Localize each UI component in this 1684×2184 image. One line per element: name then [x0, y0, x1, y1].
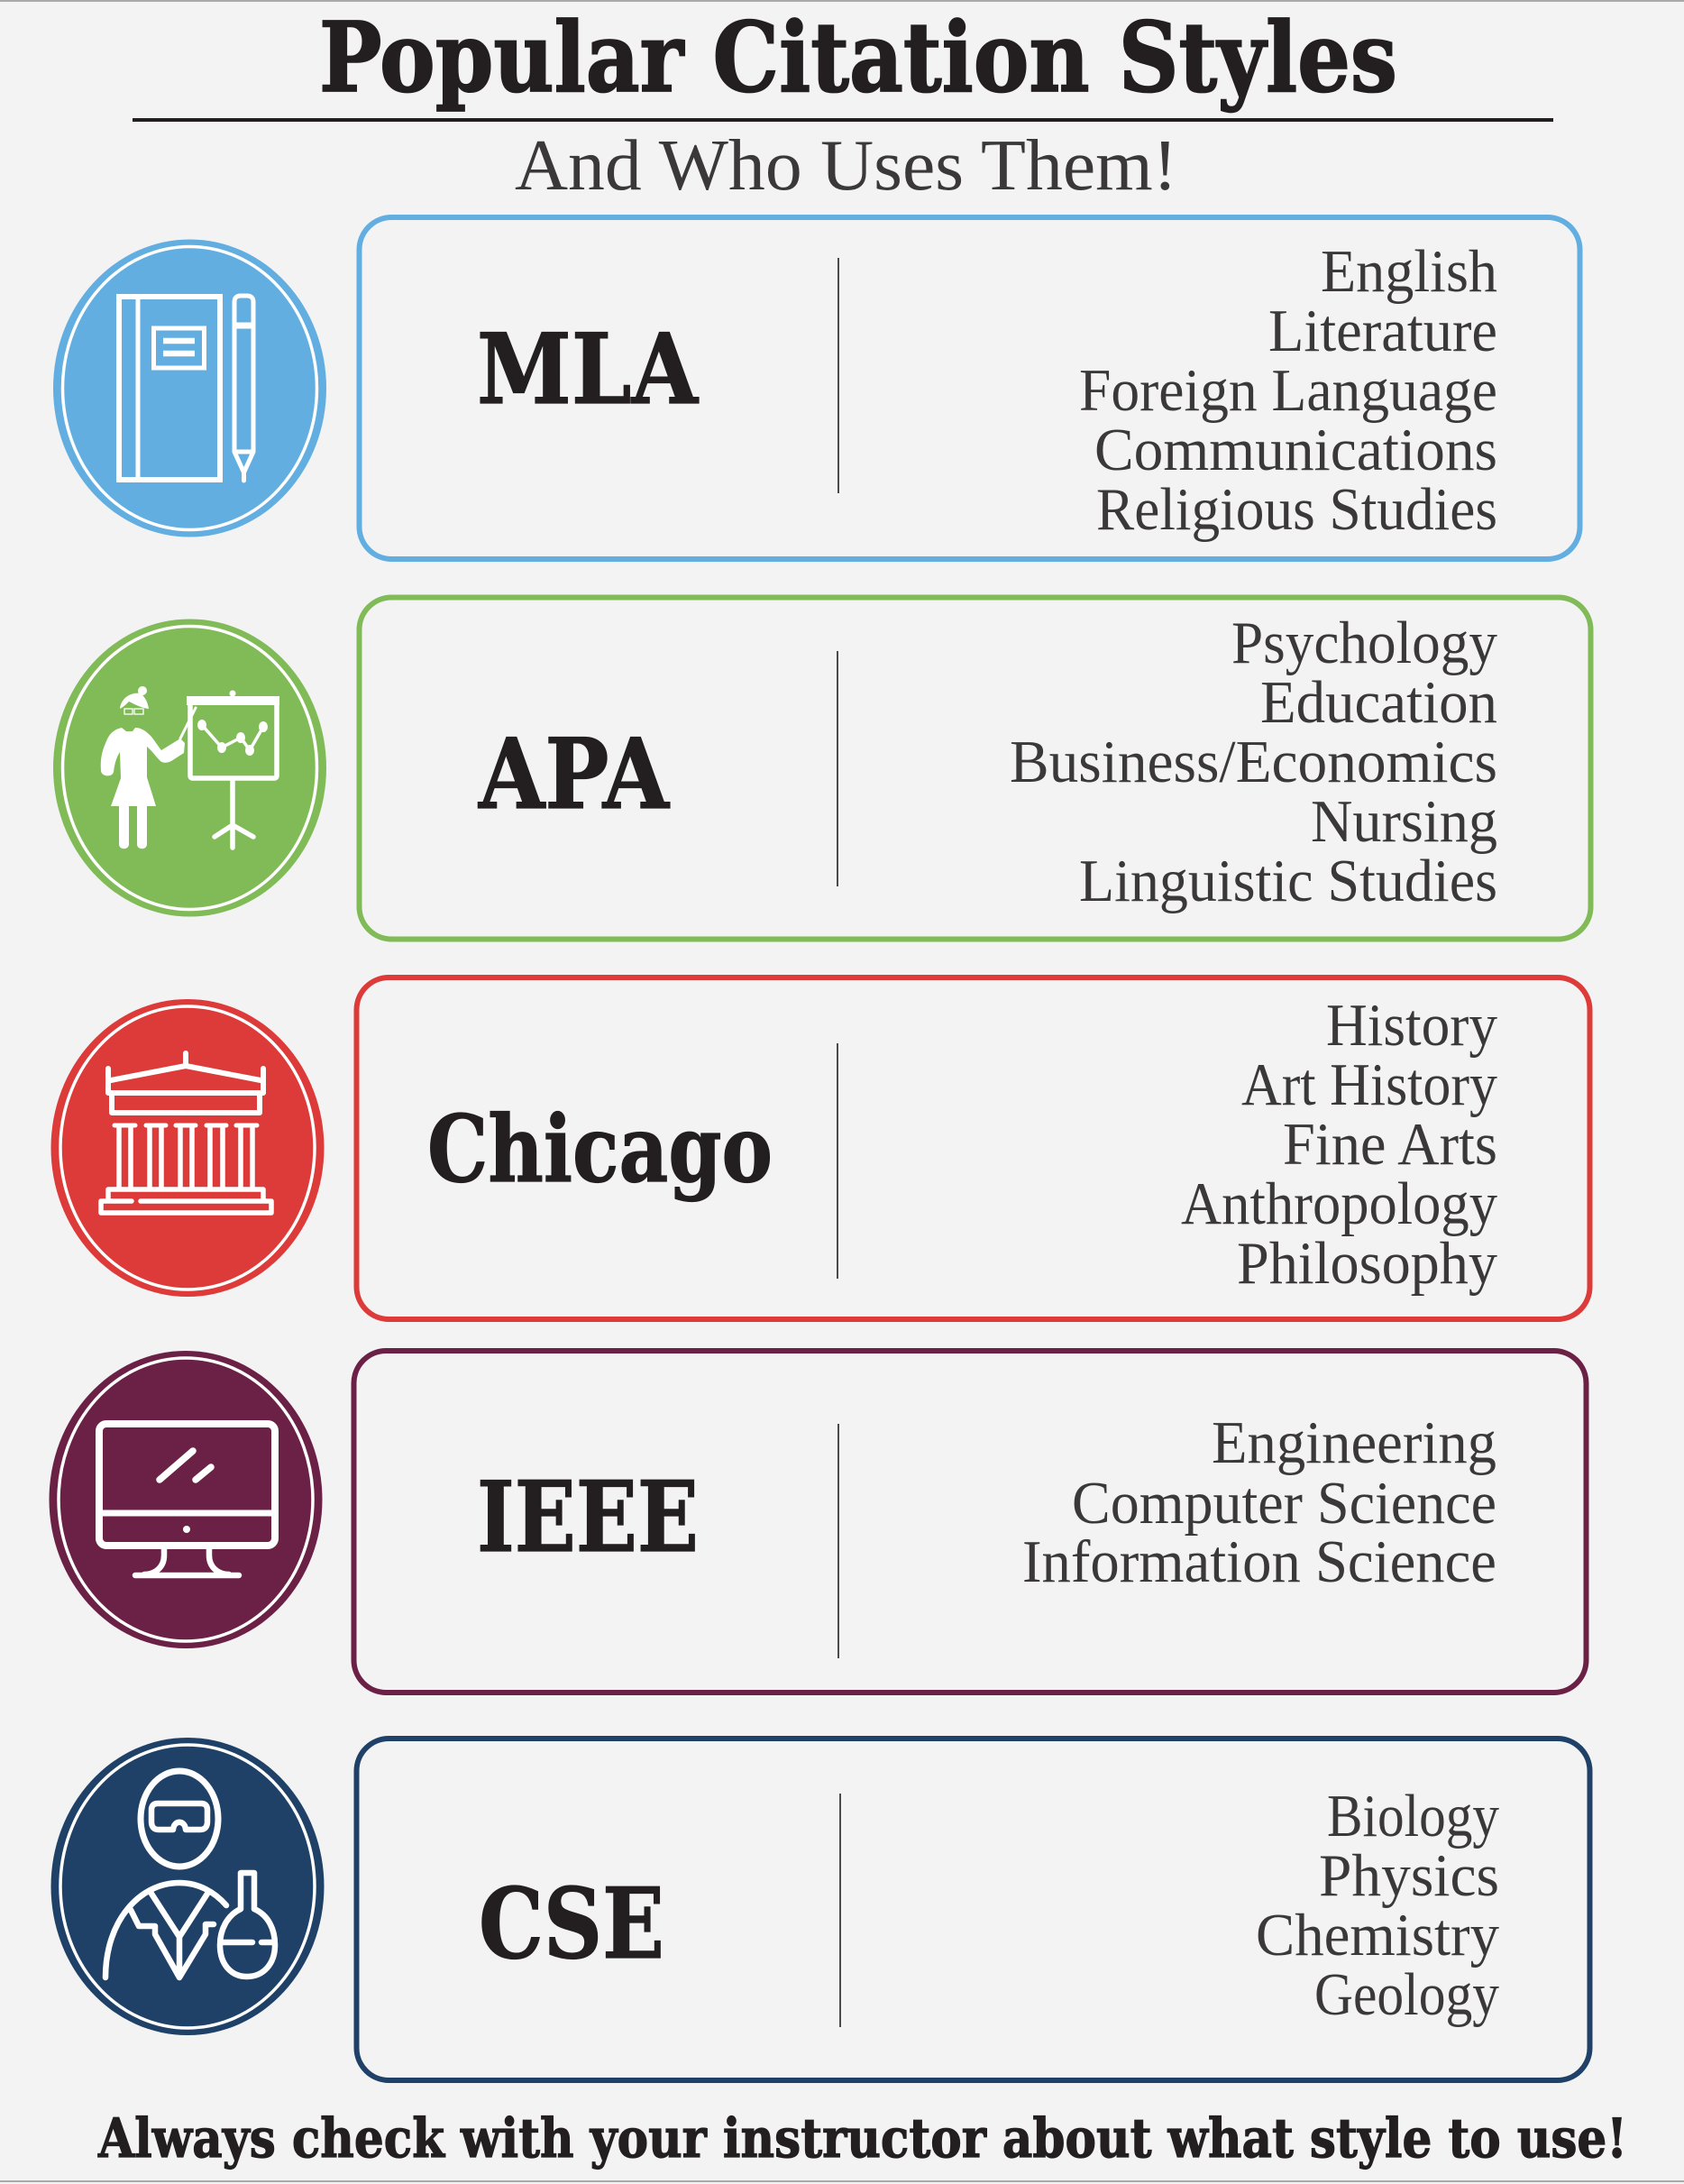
panel: CSE — [50, 1738, 1590, 2080]
Chicago disciplines list: Fine Arts — [1283, 1111, 1497, 1178]
icon: scientist with flask — [50, 1738, 325, 2035]
MLA disciplines list — [1079, 238, 1497, 543]
APA disciplines list: Business/Economics — [1010, 729, 1497, 795]
panel: APA — [53, 597, 1590, 940]
icon: classical building — [50, 999, 325, 1297]
CSE disciplines list: Physics — [1319, 1842, 1499, 1909]
MLA card outline — [359, 217, 1579, 559]
CSE style name: CSE — [479, 1867, 664, 1981]
CSE disciplines list: Geology — [1314, 1961, 1499, 2028]
icon: desktop monitor — [49, 1351, 323, 1648]
MLA disciplines list: English — [1321, 238, 1497, 305]
MLA disciplines list: Literature — [1268, 298, 1497, 364]
Chicago disciplines list — [1181, 992, 1497, 1297]
APA style name: APA — [478, 718, 671, 831]
IEEE disciplines list: Engineering — [1212, 1409, 1496, 1476]
APA disciplines list: Linguistic Studies — [1079, 848, 1497, 914]
Chicago disciplines list: History — [1326, 992, 1497, 1059]
Chicago disciplines list: Anthropology — [1181, 1170, 1497, 1237]
Chicago disciplines list: Art History — [1241, 1051, 1497, 1118]
IEEE disciplines list: Information Science — [1022, 1528, 1496, 1595]
subtitle: And Who Uses Them! — [515, 126, 1177, 206]
APA disciplines list — [1010, 610, 1497, 914]
Chicago card outline — [357, 977, 1590, 1319]
APA disciplines list: Psychology — [1231, 610, 1497, 676]
IEEE disciplines list: Computer Science — [1072, 1470, 1496, 1537]
icon: notebook and pencil — [53, 240, 326, 537]
IEEE style name: IEEE — [477, 1461, 699, 1574]
MLA style name: MLA — [477, 313, 700, 427]
APA card outline — [359, 597, 1590, 940]
title: Popular Citation Styles — [319, 2, 1397, 115]
CSE card outline — [357, 1739, 1590, 2080]
IEEE disciplines list — [1022, 1409, 1496, 1595]
panel: Chicago — [50, 977, 1590, 1319]
MLA disciplines list: Religious Studies — [1096, 476, 1497, 543]
Chicago disciplines list: Philosophy — [1237, 1230, 1497, 1297]
panel: MLA — [53, 217, 1579, 559]
panel: IEEE — [49, 1351, 1587, 1693]
IEEE card outline — [353, 1351, 1587, 1693]
APA disciplines list: Education — [1260, 669, 1497, 736]
CSE disciplines list: Chemistry — [1256, 1902, 1499, 1968]
icon: teacher presenting chart — [53, 619, 326, 916]
APA disciplines list: Nursing — [1311, 788, 1497, 855]
CSE disciplines list — [1256, 1783, 1499, 2028]
MLA disciplines list: Communications — [1094, 417, 1497, 483]
MLA disciplines list: Foreign Language — [1079, 357, 1497, 424]
CSE disciplines list: Biology — [1327, 1783, 1499, 1849]
Chicago style name: Chicago — [427, 1096, 773, 1204]
